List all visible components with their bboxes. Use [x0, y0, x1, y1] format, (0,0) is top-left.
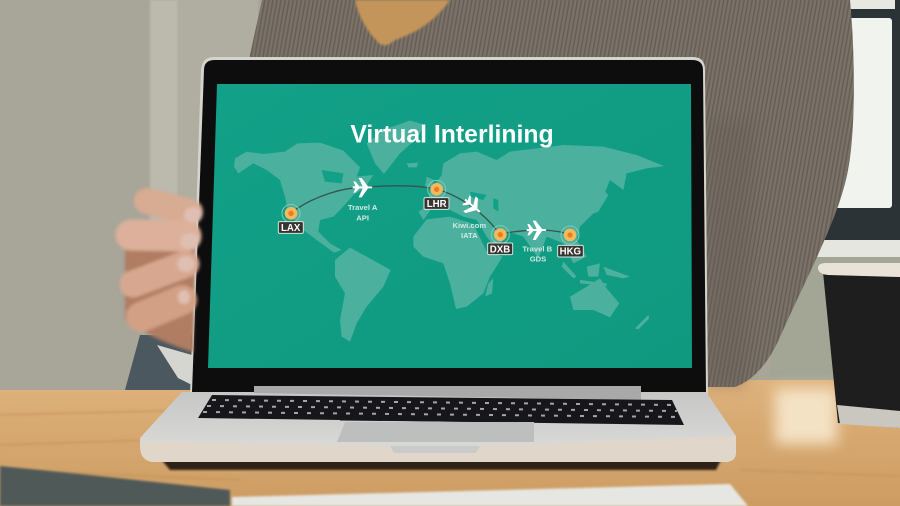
- United Kingdom: [425, 177, 434, 189]
- label: Travel A API: [348, 203, 378, 222]
- laptop base: [140, 392, 736, 462]
- New Zealand: [635, 315, 649, 329]
- Eurasia: [418, 145, 664, 263]
- airport marker: LAX: [278, 204, 303, 234]
- Australia: [570, 278, 619, 317]
- label: Travel B GDS: [522, 245, 553, 264]
- icon: plane on Kiwi.com leg: [459, 192, 486, 220]
- airport marker: LAX: LAX: [281, 223, 301, 234]
- table: [0, 380, 900, 506]
- airport marker: LHR: [424, 180, 449, 210]
- hair: [355, 0, 450, 45]
- person: grey ribbed sweater: [240, 0, 854, 387]
- icon: plane on Travel B leg: [527, 221, 546, 240]
- hand holding the screen: [125, 201, 202, 352]
- airport marker: HKG: HKG: [560, 247, 581, 258]
- keyboard: [198, 395, 684, 425]
- flight route: [296, 186, 564, 233]
- airport marker: HKG: [558, 226, 583, 258]
- slide background: [208, 84, 692, 368]
- window: [805, 0, 900, 257]
- airport marker: LHR: LHR: [427, 199, 447, 210]
- North America: [234, 143, 373, 253]
- label: Travel B GDS: GDS: [530, 255, 546, 264]
- label: Travel B GDS: Travel B: [522, 245, 553, 254]
- label: Kiwi.com IATA: Kiwi.com: [453, 221, 486, 230]
- label: Travel A API: Travel A: [348, 203, 378, 212]
- airport marker: DXB: [488, 226, 513, 255]
- Madagascar: [485, 278, 493, 297]
- Hudson Bay: [322, 170, 343, 183]
- icon: plane on Travel A leg: [353, 178, 372, 197]
- label: Kiwi.com IATA: [453, 221, 486, 240]
- blurred foreground tablet: [0, 466, 230, 506]
- Japan: [590, 192, 608, 215]
- Black and Caspian seas: [470, 192, 498, 212]
- South America: [335, 248, 391, 342]
- blurred foreground paper: [232, 484, 748, 506]
- table shadow under laptop: [155, 452, 725, 470]
- label: Travel A API: API: [356, 213, 369, 222]
- Greenland: [367, 121, 425, 174]
- Africa: [413, 217, 503, 309]
- laptop lid: [190, 57, 708, 396]
- laptop: [140, 57, 736, 470]
- slide screen: [208, 84, 692, 368]
- trackpad: [337, 422, 534, 442]
- airport marker: DXB: DXB: [490, 244, 510, 255]
- coffee cup: [818, 263, 900, 428]
- label: Kiwi.com IATA: IATA: [461, 231, 478, 240]
- background wall: [0, 0, 900, 400]
- Iceland: [407, 163, 418, 167]
- title: Virtual Interlining: [350, 120, 554, 148]
- base front lip: [141, 436, 736, 462]
- Indonesia and Philippines: [562, 262, 630, 286]
- hinge: [254, 386, 641, 400]
- world map: [234, 121, 664, 342]
- chair and sleeve cuff: [125, 335, 195, 390]
